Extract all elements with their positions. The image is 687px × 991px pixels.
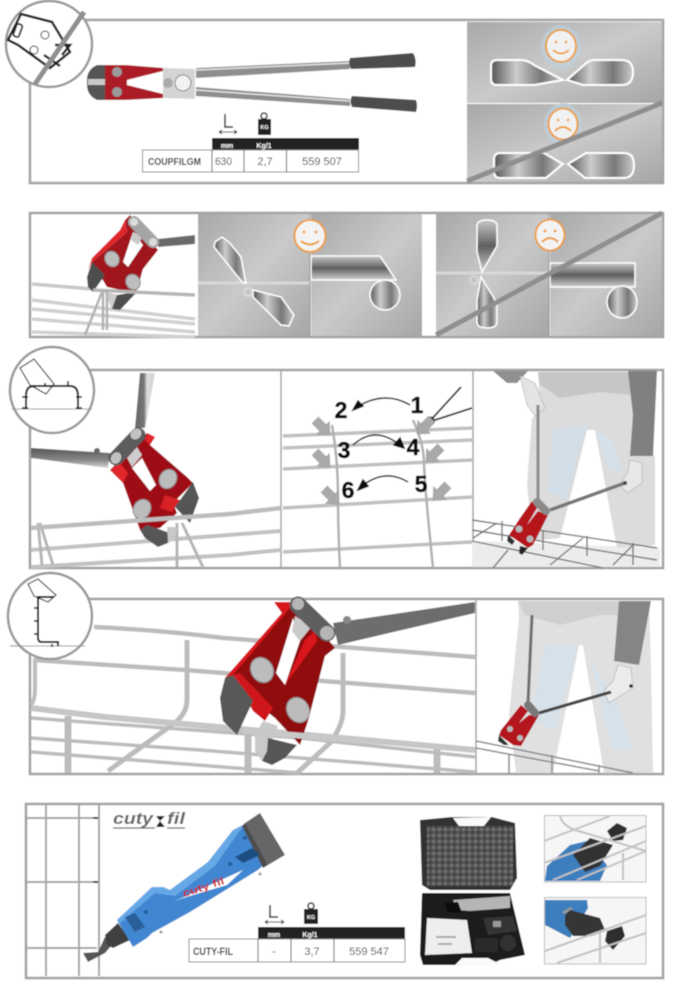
photo: cutter at side of tray [544, 898, 646, 964]
icon: prohibited use circle [6, 1, 92, 87]
icon: pliers [428, 387, 472, 424]
logo: cuty fil [113, 809, 187, 828]
icon: weight symbol: KG [307, 915, 315, 921]
logo: cuty fil: cuty [113, 809, 155, 828]
table: cuty-fil specifications: mm [268, 932, 280, 939]
illustration: electric cutter: cuty fil [182, 876, 226, 900]
panel: bolt cutter product [6, 1, 663, 183]
table: cuty-fil specifications: 3,7 [304, 946, 320, 958]
illustration: large cutter head [220, 598, 475, 765]
arrows: cut position markers [309, 413, 454, 510]
illustration: operator cutting side wire [476, 601, 653, 773]
icon: side edge cut circle [8, 573, 92, 659]
table: cuty-fil specifications [189, 927, 405, 962]
panel: correct angle [198, 214, 422, 336]
panel: incorrect angle [436, 213, 662, 336]
icon: weight symbol [304, 903, 318, 924]
logo: cuty fil: fil [167, 809, 187, 828]
numbers: cut order: 1 [411, 392, 424, 418]
illustration: cutter on tray [32, 215, 195, 337]
table: coupfilgm specifications [142, 138, 359, 172]
illustration: wire mesh [27, 805, 99, 976]
illustration: carrying case [420, 817, 525, 966]
table: coupfilgm specifications: 2,7 [257, 156, 273, 168]
illustration: electric cutter [83, 813, 285, 962]
numbers: cut order [335, 392, 428, 503]
numbers: cut order: 3 [338, 437, 350, 463]
illustration: operator cutting tray [472, 371, 660, 568]
photo: cutter at top of tray [544, 816, 646, 882]
table: coupfilgm specifications: 559 507 [302, 156, 342, 168]
table: cuty-fil specifications: 559 547 [349, 946, 389, 958]
table: coupfilgm specifications: Kg/1 [256, 143, 272, 150]
table: coupfilgm specifications: 630 [215, 156, 232, 168]
icon: length symbol [265, 905, 284, 924]
panel: cutting a tray section [10, 347, 663, 568]
illustration: cutter close-up [31, 373, 281, 567]
numbers: cut order: 6 [342, 477, 354, 503]
illustration: tray wires [31, 627, 475, 773]
icon: bolt cutter tool [87, 53, 417, 112]
table: cuty-fil specifications: CUTY-FIL [193, 946, 233, 958]
table: coupfilgm specifications: mm [221, 143, 233, 150]
icon: length symbol [219, 114, 237, 134]
panel: cutting a side wire [8, 573, 663, 774]
table: cuty-fil specifications: - [272, 946, 276, 958]
arrows: order curves [353, 398, 410, 490]
panel: incorrect cut [467, 103, 662, 182]
table: coupfilgm specifications: COUPFILGM [148, 157, 201, 168]
table: cuty-fil specifications: Kg/1 [302, 932, 318, 939]
panel: correct cut [467, 22, 662, 103]
icon: top edge cut circle [10, 347, 94, 433]
diagram: cutting sequence [283, 387, 472, 568]
icon: weight symbol [258, 113, 271, 135]
numbers: cut order: 2 [335, 397, 347, 423]
numbers: cut order: 5 [415, 471, 428, 497]
numbers: cut order: 4 [407, 434, 420, 460]
icon: weight symbol: KG [260, 125, 269, 131]
panel: cuty-fil electric cutter [26, 804, 663, 978]
panel: cutting angle comparison [30, 213, 663, 337]
